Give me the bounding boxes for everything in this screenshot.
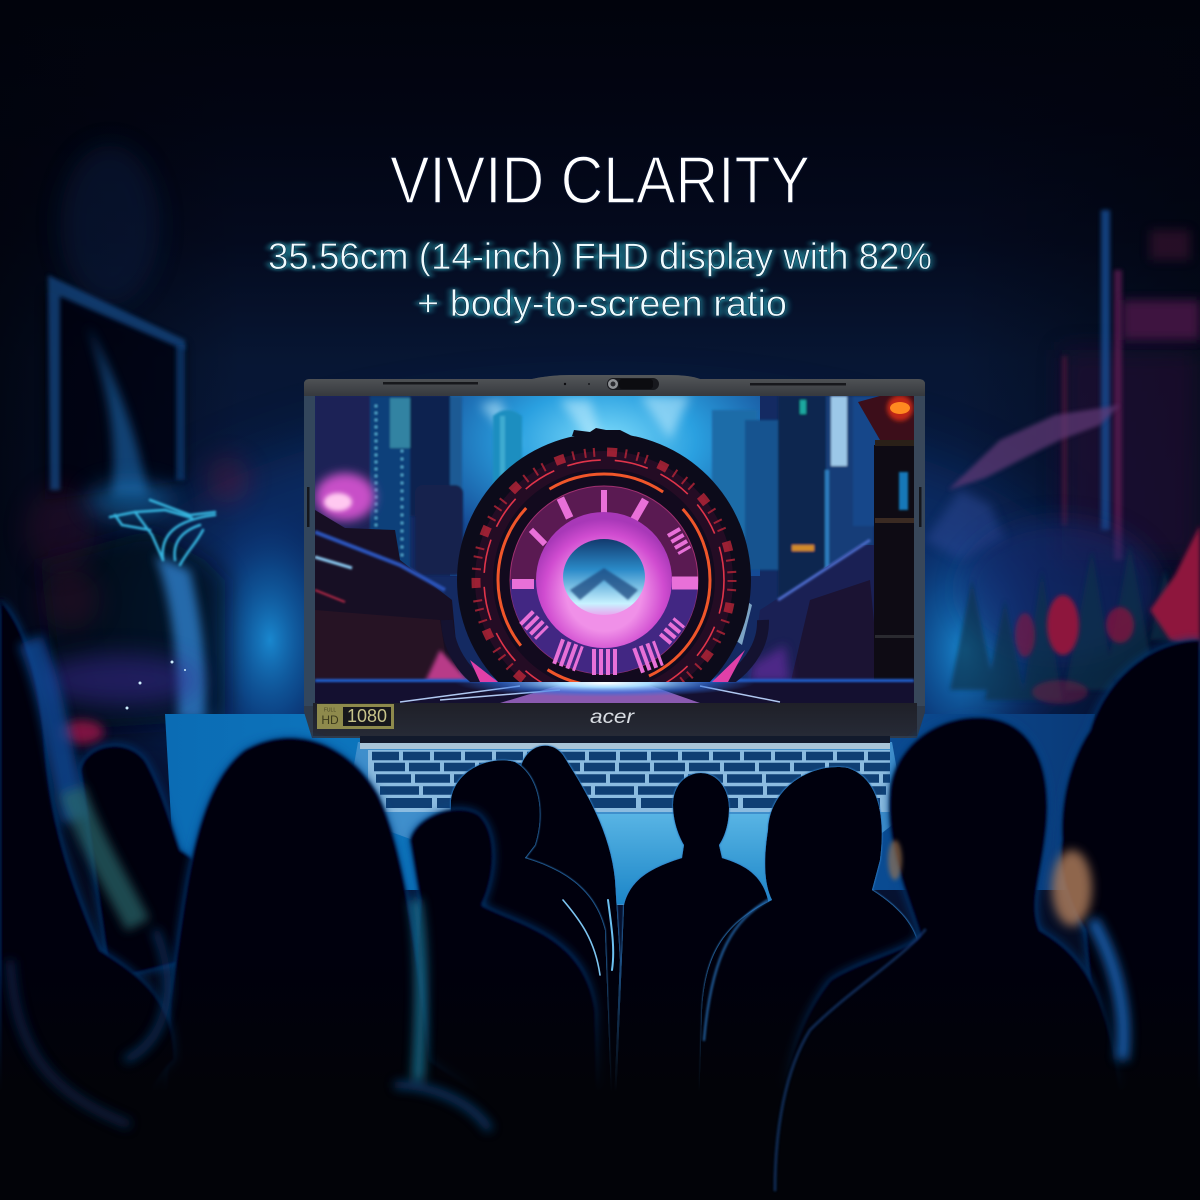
full HD 1080 badge: HD (321, 713, 339, 727)
portal hole (563, 539, 645, 615)
keyboard keys (372, 756, 890, 803)
mural: left cliff and waterfall (25, 275, 250, 744)
person: large right foreground (775, 717, 1130, 1200)
roman numeral markers (512, 503, 698, 662)
person: mid left hood (400, 809, 600, 1200)
side arms (447, 620, 480, 682)
red foliage (1015, 525, 1200, 704)
pink explosion (315, 473, 375, 521)
mural: right mountain and forest (925, 210, 1200, 704)
full HD 1080 badge: FULL (324, 708, 336, 714)
left ruins and bridge (315, 510, 470, 685)
subtitle text: + body-to-screen ratio (417, 283, 787, 324)
tower with red beacon (858, 395, 914, 685)
person: center man (612, 773, 772, 1200)
person: mid left with shoulders (440, 760, 615, 1200)
clock portal (441, 428, 769, 682)
person: far right (1061, 640, 1200, 1200)
bezel (304, 375, 925, 738)
city left (316, 396, 523, 576)
outer dark ring (457, 436, 751, 682)
chin (313, 703, 917, 736)
thin rim highlights (563, 900, 925, 1190)
city right (712, 396, 883, 606)
laptop lid (304, 375, 925, 743)
subtitle text (268, 236, 932, 324)
red circuit ring (476, 452, 732, 708)
dark forest trees (950, 545, 1180, 700)
person: large center-left foreground (160, 738, 510, 1200)
person: long hair (520, 746, 620, 1200)
audience silhouettes (0, 600, 1200, 1200)
icon: glowing tree (110, 500, 215, 565)
subtitle text: 35.56cm (14-inch) FHD display with 82% (268, 236, 932, 277)
title: VIVID CLARITY (390, 143, 810, 218)
icon: glowing ear (1052, 850, 1092, 926)
icon: ear highlight (888, 840, 902, 880)
orange arc ring (493, 469, 715, 691)
floor (315, 674, 914, 703)
numeral ring (510, 486, 698, 674)
person: far left foreground (0, 600, 175, 1200)
rim light streaks (10, 640, 1123, 1130)
person: mid right (696, 767, 920, 1200)
right ruins and bridge (750, 540, 880, 685)
table surface (165, 714, 1095, 890)
speaker slits (383, 382, 478, 384)
full HD 1080 badge: 1080 (347, 706, 387, 726)
pink inner ring (536, 512, 672, 648)
foreground shadow (0, 960, 1200, 1200)
icon: webcam shutter (564, 378, 659, 390)
acer logo: acer (590, 707, 635, 728)
laptop keyboard deck (345, 741, 905, 905)
screen artwork (315, 395, 914, 727)
full HD 1080 badge (317, 704, 394, 729)
sky (450, 396, 760, 576)
person: small hair, far left (80, 746, 195, 980)
